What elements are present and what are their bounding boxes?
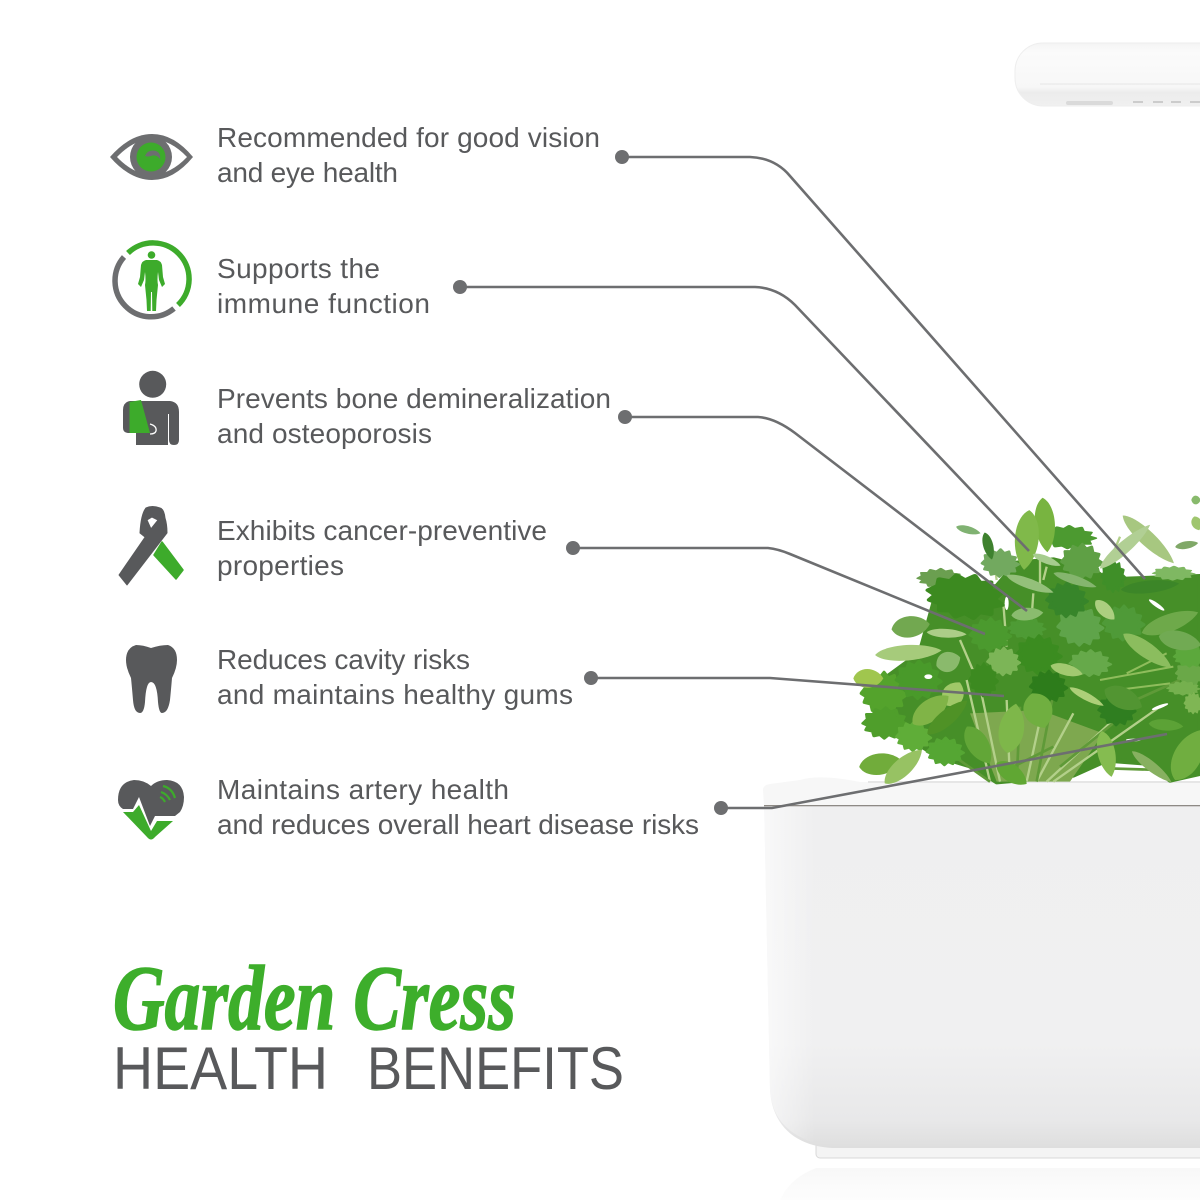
lamp hood xyxy=(1015,43,1200,106)
small gaps between leaves xyxy=(924,597,1169,741)
plant: garden cress xyxy=(853,496,1200,791)
title: Garden Cress: Garden Cress xyxy=(113,947,516,1049)
reflection under planter xyxy=(780,1168,1200,1200)
leader line 1 xyxy=(622,157,1145,579)
benefit 2 text: immune function xyxy=(217,288,430,319)
benefit 3 text: and osteoporosis xyxy=(217,418,432,449)
leader line 3 xyxy=(625,417,1027,611)
jagged dark leaves xyxy=(861,526,1200,765)
subtitle: Health Benefits: BENEFITS xyxy=(367,1035,624,1102)
leader dots xyxy=(453,150,728,815)
benefit 1 text: and eye health xyxy=(217,157,398,188)
benefit 1 text: Recommended for good vision xyxy=(217,122,600,153)
icon: human body in ring xyxy=(115,243,189,317)
planter xyxy=(763,777,1200,1158)
subtitle: Health Benefits: HEALTH xyxy=(113,1035,328,1102)
smooth leaves xyxy=(853,496,1200,791)
benefit 6 text: and reduces overall heart disease risks xyxy=(217,809,699,840)
benefit 5 text: Reduces cavity risks xyxy=(217,644,470,675)
leader line 5 xyxy=(591,678,1004,696)
benefit 4 text: Exhibits cancer-preventive xyxy=(217,515,547,546)
benefit 3 text: Prevents bone demineralization xyxy=(217,383,611,414)
leader line 2 xyxy=(460,287,1029,551)
icon: awareness ribbon xyxy=(119,506,183,585)
benefit 2 text: Supports the xyxy=(217,253,380,284)
icon: tooth xyxy=(126,645,177,713)
foliage mass and stems xyxy=(877,537,1200,782)
benefit 4 text: properties xyxy=(217,550,344,581)
icon: heart with pulse xyxy=(118,780,184,840)
icon: person with arm sling xyxy=(123,371,179,445)
leader line 4 xyxy=(573,548,985,634)
leader lines xyxy=(460,157,1167,808)
benefit 5 text: and maintains healthy gums xyxy=(217,679,573,710)
benefit 6 text: Maintains artery health xyxy=(217,774,509,805)
leader line 6 xyxy=(721,734,1167,808)
icon: eye xyxy=(110,134,193,180)
